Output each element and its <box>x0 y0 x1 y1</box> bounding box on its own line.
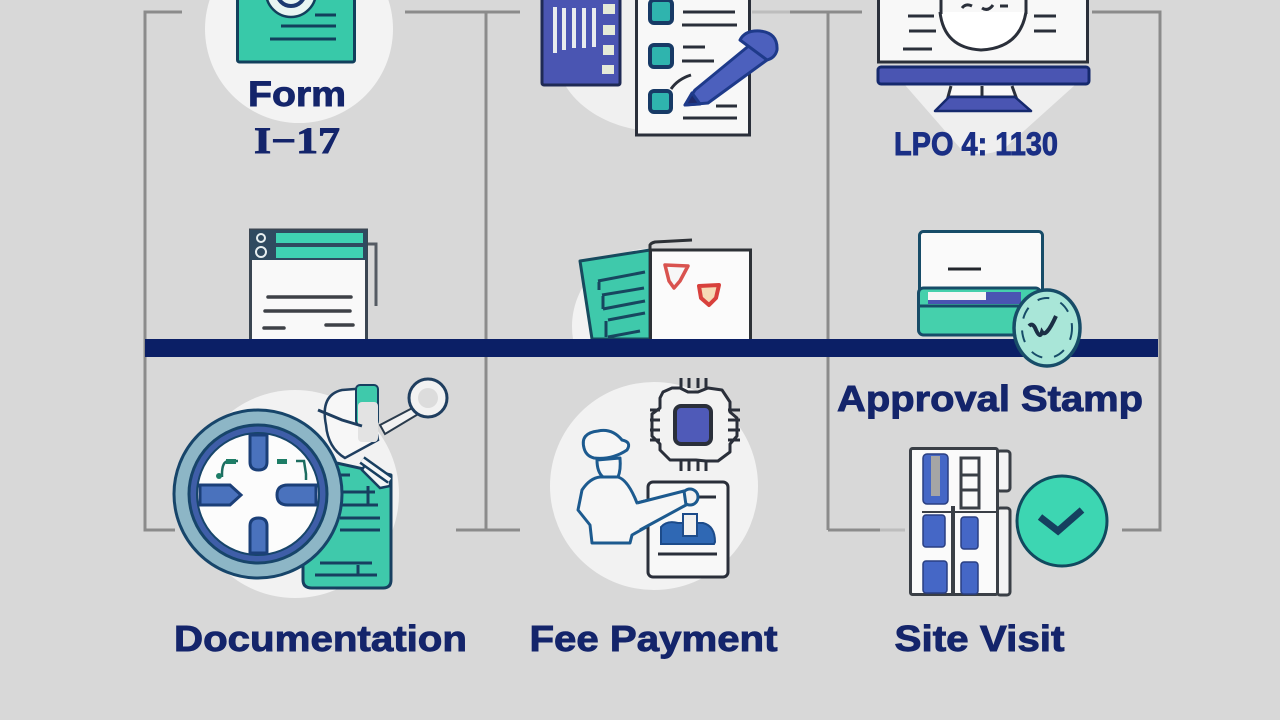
icon: teal document <box>303 462 391 588</box>
icon: site building <box>910 448 1010 595</box>
icon: green check badge <box>1017 476 1107 566</box>
icon: monitor <box>878 0 1089 111</box>
panel: Documentation <box>174 379 447 598</box>
icon: checklist sheet <box>636 0 750 135</box>
icon: pen <box>685 31 777 105</box>
icon: blue folder <box>542 0 620 85</box>
icon: person <box>578 430 686 543</box>
panel: Form I-17 <box>205 0 393 162</box>
icon: inspector figure with wrench <box>318 379 447 480</box>
icon: approval stamp machine <box>918 232 1042 335</box>
icon: ID card <box>637 482 728 577</box>
icon: approval stamp seal <box>1014 290 1080 366</box>
heading: Approval Stamp: Approval Stamp <box>837 378 1143 419</box>
icon: papers with shields <box>572 240 750 342</box>
heading: LPO label: LPO 4: 1130 <box>894 126 1058 162</box>
heading: Form: Form <box>248 75 346 114</box>
heading: Fee Payment: Fee Payment <box>530 618 778 659</box>
panel: LPO monitor <box>878 0 1089 162</box>
panel: Fee Payment <box>550 378 758 590</box>
icon: chip <box>650 378 740 471</box>
navy timeline bar <box>145 339 1158 357</box>
icon: magnifying glass <box>174 410 342 578</box>
icon: window document <box>250 230 376 342</box>
heading: I-17: I−17 <box>254 121 340 162</box>
panel: checklist <box>542 0 777 135</box>
heading: Documentation: Documentation <box>174 618 467 659</box>
icon: form document <box>238 0 354 62</box>
heading: Site Visit: Site Visit <box>894 618 1065 659</box>
